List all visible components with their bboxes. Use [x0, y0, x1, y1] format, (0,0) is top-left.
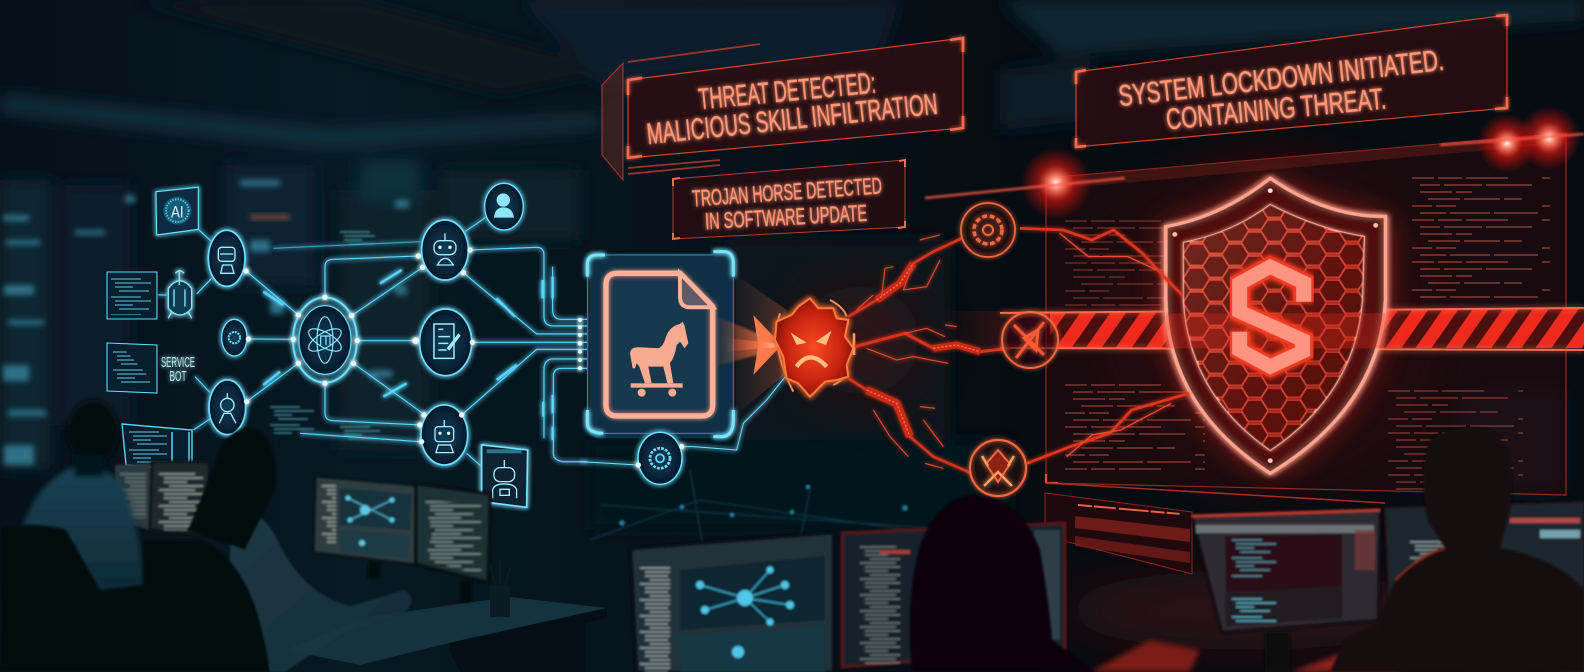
warning flares	[925, 106, 1584, 219]
monitor: far right	[1385, 502, 1584, 672]
heading: containing threat: CONTAINING THREAT.	[1165, 82, 1388, 137]
projection beam to threat	[733, 273, 787, 417]
floating text fragments	[270, 230, 380, 439]
heading: malicious skill infiltration: MALICIOUS SKILL INFILTRATION	[645, 88, 939, 151]
panel: lower red status table	[1045, 493, 1192, 574]
icon node: red gear	[961, 203, 1015, 257]
network connector lines	[158, 217, 587, 467]
code card lower	[107, 343, 157, 393]
heading: threat detected: THREAT DETECTED:	[697, 67, 877, 116]
code card lower left behind operator	[122, 424, 192, 470]
icon node: red bug emblem	[970, 440, 1026, 496]
monitor: code graph on desk	[416, 484, 490, 609]
icon node: user profile	[485, 183, 523, 230]
icon node: small gear left	[222, 319, 251, 356]
shield with S emblem	[1166, 178, 1385, 473]
notice text line 1: TROJAN HORSE DETECTED	[691, 172, 883, 212]
operator: woman left with chair	[0, 428, 412, 672]
icon card: AI	[156, 187, 198, 235]
monitor: network dashboard foreground	[631, 533, 833, 672]
operator: woman right silhouette	[910, 495, 1095, 672]
panel: system lockdown headline	[1076, 15, 1507, 147]
icon: beetle service robot	[168, 270, 192, 318]
desk red glow	[1090, 640, 1400, 672]
monitor: network dashboard on desk	[314, 477, 418, 578]
icon node: red broken bot	[1002, 312, 1058, 368]
icon node: bottom robot	[417, 405, 468, 465]
operator: man left	[0, 400, 145, 672]
desk with pen cup	[286, 560, 607, 672]
operator: man right silhouette	[1330, 428, 1584, 672]
panel: system console behind shield	[1046, 133, 1566, 503]
panel: threat detected headline	[602, 38, 963, 180]
icon card: AI: AI	[171, 202, 184, 221]
code block: upper left	[1065, 218, 1175, 306]
blue data pins entering file card	[578, 318, 582, 370]
icon node: robot lower left	[209, 380, 249, 435]
monitor: rear left	[115, 462, 209, 535]
label line one: SERVICE	[161, 355, 195, 371]
lightning threat branches	[848, 235, 1010, 473]
icon card: robot profile	[482, 445, 528, 507]
heading: system lockdown: SYSTEM LOCKDOWN INITIATED.	[1117, 44, 1445, 113]
code card upper	[107, 272, 157, 319]
icon node: central atom hub	[291, 295, 360, 386]
side wing of panel	[602, 63, 623, 180]
malicious bot threat icon	[775, 298, 854, 397]
lightning into shield	[1020, 228, 1189, 463]
malicious file card with trojan horse	[587, 252, 787, 438]
icon node: top robot	[416, 220, 473, 280]
icon node: document	[412, 309, 475, 376]
panel: trojan horse notice	[673, 160, 905, 239]
notice text line 2: IN SOFTWARE UPDATE	[704, 200, 868, 234]
icon node: robot upper left	[208, 230, 249, 286]
code block: lower left	[1065, 382, 1205, 474]
code block: upper right	[1412, 175, 1550, 300]
code block: lower right	[1388, 388, 1523, 494]
right side red ambient glow	[800, 160, 1440, 650]
icon node: gear under file	[580, 375, 787, 484]
label: service bot	[161, 355, 195, 385]
monitor: code screen right	[1192, 510, 1380, 672]
icon: horse	[630, 322, 688, 383]
label line two: BOT	[170, 369, 187, 385]
monitor: code screen behind woman	[842, 523, 1065, 667]
hazard lockdown band	[935, 308, 1584, 350]
arrow into threat	[713, 315, 782, 375]
